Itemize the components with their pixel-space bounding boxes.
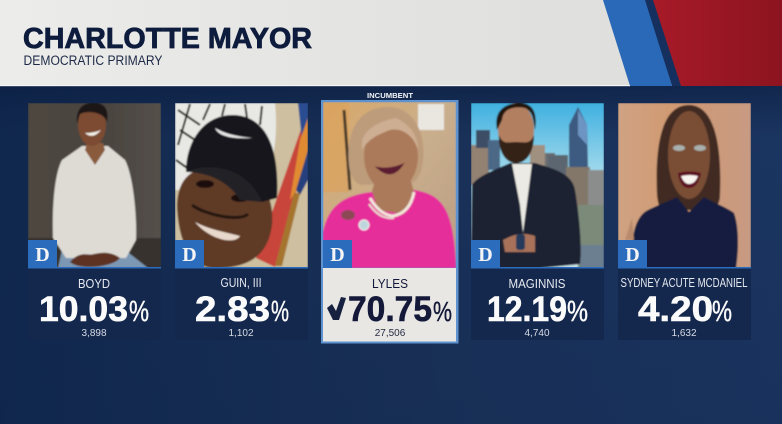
background	[0, 86, 782, 424]
winner checkmark	[327, 297, 346, 320]
party badge: D	[625, 244, 640, 266]
candidate name: LYLES	[372, 276, 408, 291]
percent sign: %	[712, 296, 732, 328]
vote percentage: 4.20	[638, 290, 713, 329]
header banner	[0, 0, 782, 86]
party badge	[471, 240, 500, 268]
candidate name: SYDNEY ACUTE MCDANIEL	[620, 276, 748, 290]
percent sign: %	[129, 296, 149, 328]
portrait: Lyles	[323, 102, 456, 268]
portrait: Guin	[175, 103, 308, 268]
candidate name: MAGINNIS	[508, 276, 566, 291]
party badge: D	[330, 244, 345, 266]
vote count: 4,740	[524, 328, 550, 339]
title: CHARLOTTE MAYOR	[23, 23, 312, 55]
vote count: 27,506	[375, 328, 406, 339]
party badge	[28, 240, 57, 268]
percent sign: %	[433, 296, 452, 327]
party badge	[175, 240, 204, 268]
percent sign: %	[271, 296, 289, 328]
vote count: 3,898	[81, 328, 107, 339]
portrait: Maginnis	[471, 103, 604, 268]
vote percentage: 2.83	[195, 290, 270, 329]
vote percentage: 70.75	[348, 290, 432, 329]
percent sign: %	[567, 296, 588, 328]
subtitle: DEMOCRATIC PRIMARY	[24, 53, 162, 68]
candidate card: Maginnis	[471, 103, 604, 340]
party badge: D	[182, 244, 197, 266]
vote count: 1,632	[671, 328, 697, 339]
candidate card: Sydney Acute McDaniel	[618, 103, 751, 340]
candidate card: Lyles (winner)	[321, 100, 458, 344]
party badge	[323, 240, 352, 268]
incumbent label: INCUMBENT	[367, 91, 413, 100]
party badge: D	[478, 244, 493, 266]
vote percentage: 12.19	[487, 290, 567, 329]
candidate card: Boyd	[28, 103, 161, 340]
portrait: McDaniel	[618, 103, 751, 268]
candidate name: BOYD	[78, 276, 110, 291]
party badge: D	[35, 244, 50, 266]
portrait: Boyd	[28, 103, 161, 268]
vote count: 1,102	[228, 328, 254, 339]
party badge	[618, 240, 647, 268]
candidate name: GUIN, III	[220, 276, 262, 290]
candidate card: Guin, III	[175, 103, 308, 340]
vote percentage: 10.03	[39, 290, 128, 329]
